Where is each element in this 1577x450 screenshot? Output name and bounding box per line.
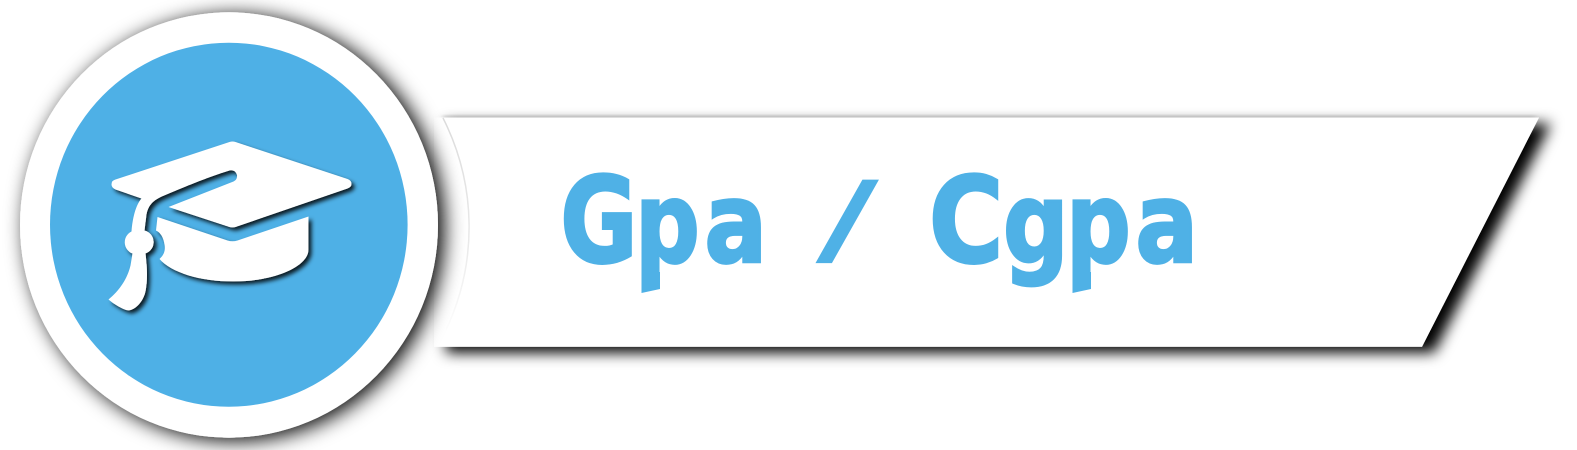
title: Gpa / Cgpa: G <box>560 152 638 291</box>
title: Gpa / Cgpa: g <box>1003 159 1069 289</box>
title: Gpa / Cgpa: a <box>1135 160 1198 289</box>
icon: graduation cap <box>108 142 352 310</box>
badge circle <box>20 12 438 438</box>
banner panel <box>434 116 1539 347</box>
title: Gpa / Cgpa: p <box>1066 159 1131 288</box>
title: Gpa / Cgpa: p <box>635 159 700 288</box>
inner blue disc <box>50 43 408 407</box>
title: Gpa / Cgpa: C <box>929 152 1004 291</box>
title: Gpa / Cgpa: / <box>813 158 882 279</box>
title: Gpa / Cgpa <box>560 152 1198 293</box>
title: Gpa / Cgpa: a <box>704 160 767 289</box>
